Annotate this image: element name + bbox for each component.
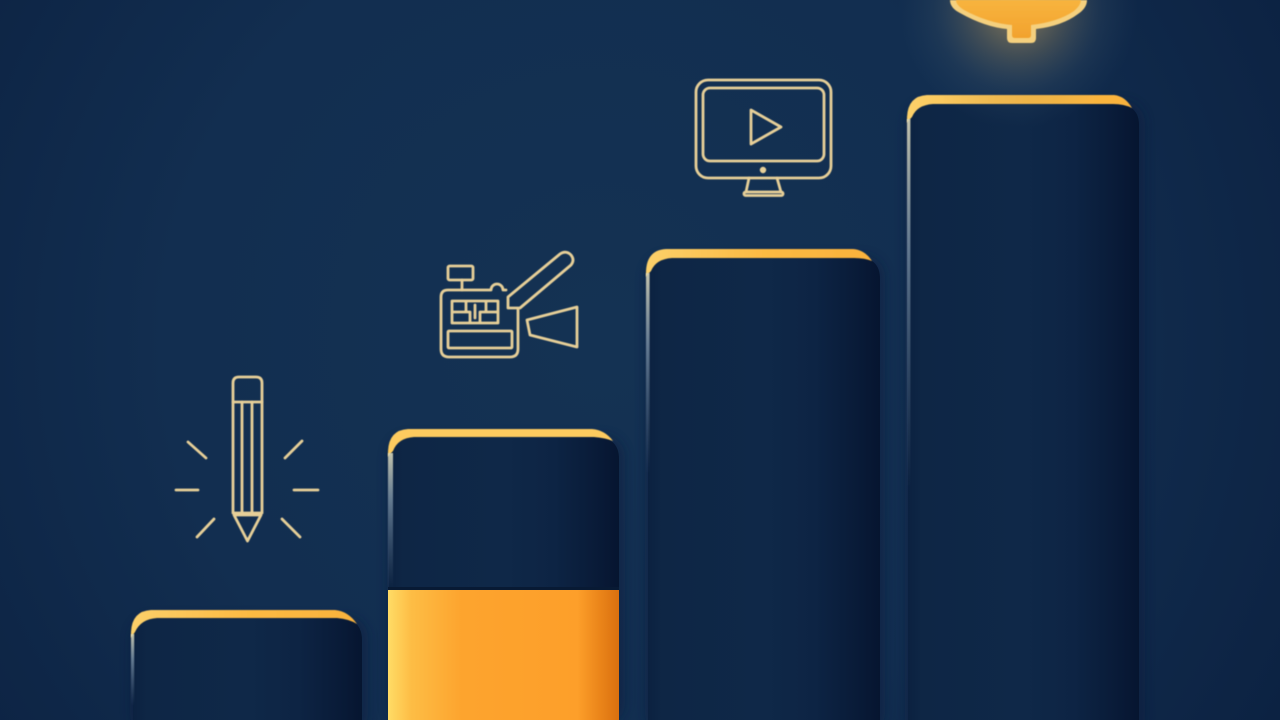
gold top edge: [388, 429, 613, 457]
gold top edge: [131, 610, 357, 638]
gold top edge: [646, 249, 872, 277]
bar 1: [130, 610, 368, 720]
icon: glowing coin at top: [880, 0, 1160, 135]
orange fill section: [388, 590, 619, 720]
icon: cash register with megaphone: [441, 252, 577, 357]
icon: pencil with rays: [176, 377, 318, 541]
bar 3: [645, 249, 885, 720]
bar 2: [387, 429, 625, 720]
gold top edge: [907, 95, 1132, 123]
icon: monitor with play button: [696, 80, 831, 196]
bar 4: [905, 95, 1145, 720]
